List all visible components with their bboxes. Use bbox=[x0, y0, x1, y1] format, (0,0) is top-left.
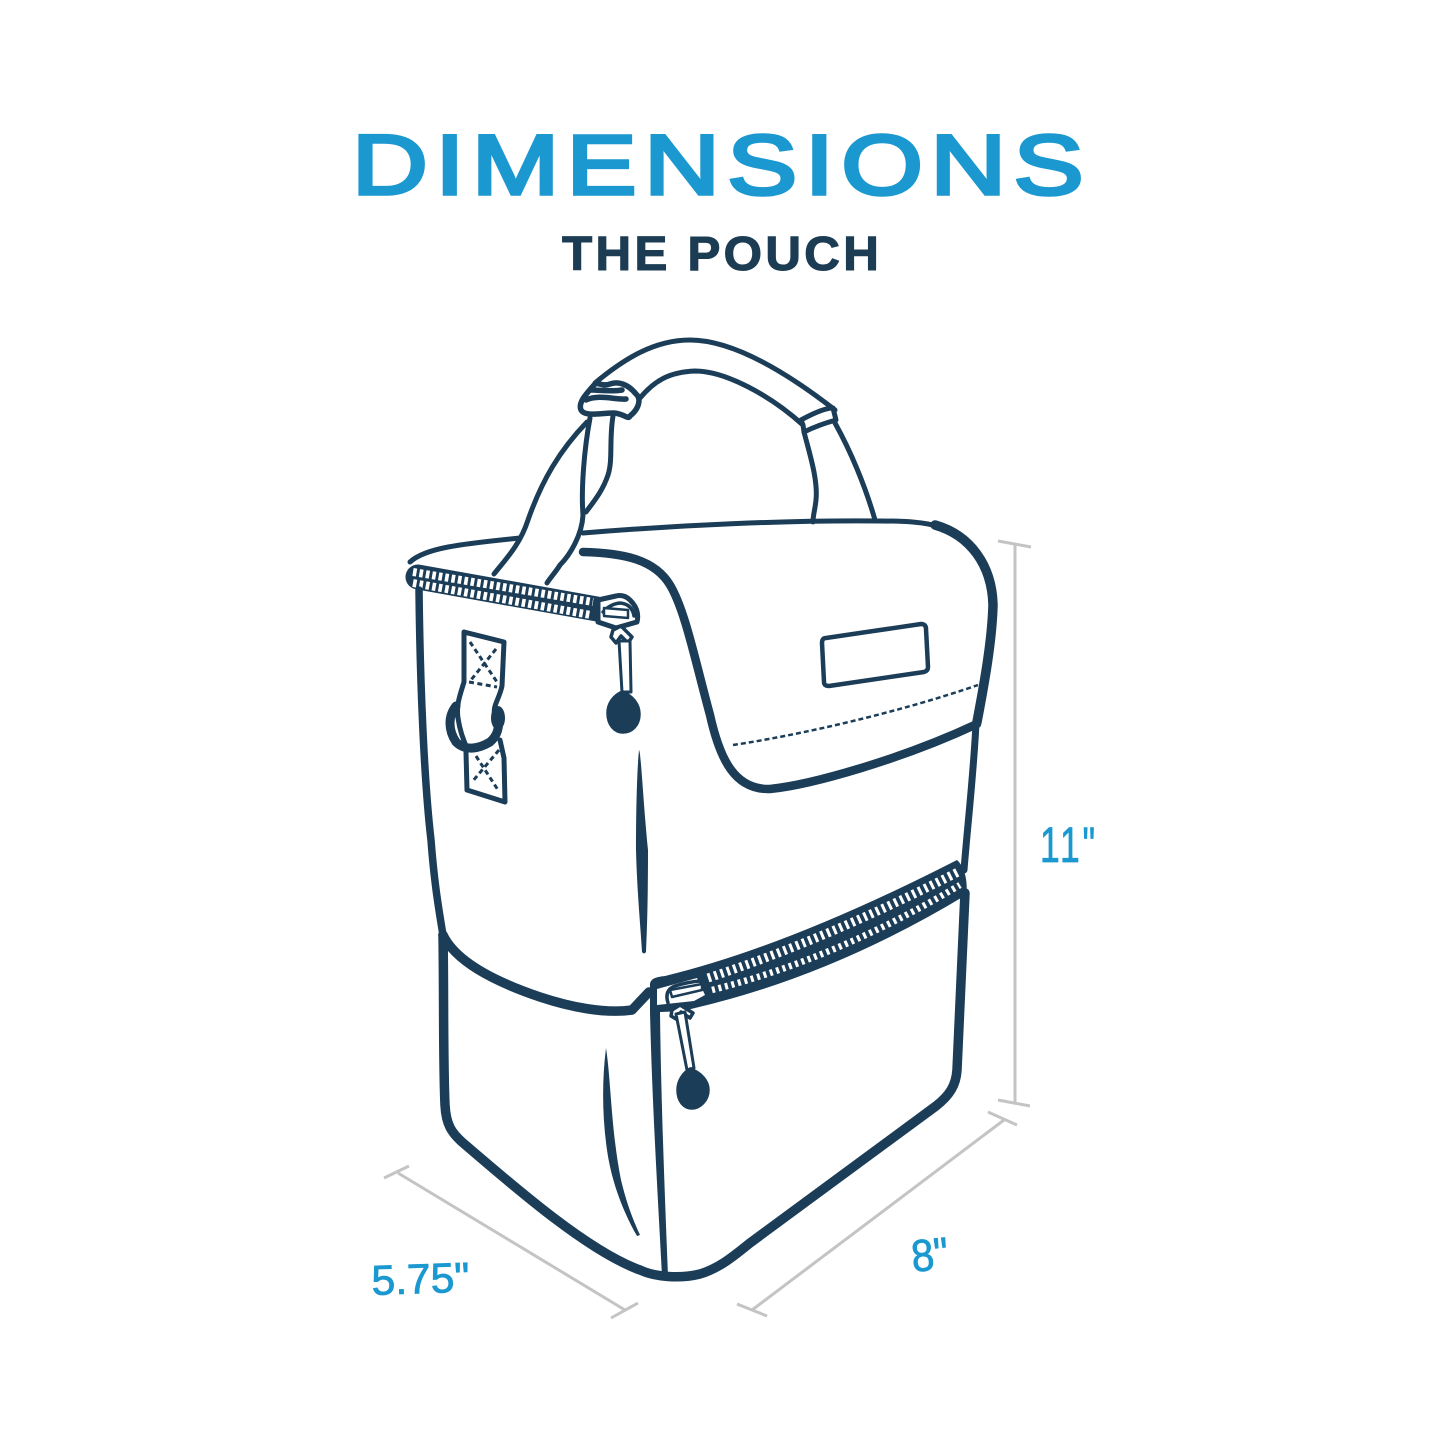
lower zipper pull bbox=[671, 1005, 709, 1109]
top zipper pull bbox=[607, 626, 640, 733]
label: width 5.75 inches: 5.75" bbox=[371, 1254, 470, 1304]
front corner seam, lower bbox=[650, 1012, 668, 1276]
name badge bbox=[822, 624, 928, 686]
dimension line: width bbox=[384, 1166, 638, 1318]
side strap tab bbox=[450, 632, 505, 802]
title: DIMENSIONS bbox=[352, 118, 1091, 212]
dimension line: length bbox=[737, 1112, 1017, 1316]
label: height 11 inches: 11" bbox=[1040, 817, 1098, 873]
middle seam bbox=[443, 935, 649, 1011]
lower zipper bbox=[650, 860, 967, 1012]
body left edge bbox=[419, 590, 443, 935]
handle grip bbox=[595, 340, 836, 432]
bag top rim bbox=[410, 538, 520, 562]
handle right strap bbox=[804, 423, 875, 522]
body lower outline bbox=[443, 893, 965, 1277]
illustration: insulated lunch bag bbox=[410, 340, 993, 1277]
dimension line: height bbox=[998, 541, 1031, 1106]
subtitle: THE POUCH bbox=[562, 228, 882, 281]
label: length 8 inches: 8" bbox=[909, 1227, 951, 1282]
handle left strap bbox=[494, 416, 613, 583]
handle left wrap bbox=[580, 383, 639, 417]
body right edge bbox=[964, 724, 976, 870]
top zipper slider bbox=[598, 596, 638, 628]
top zipper bbox=[413, 572, 597, 615]
flap stitching bbox=[733, 685, 978, 745]
side crease bbox=[603, 1048, 640, 1236]
flap outline bbox=[583, 521, 940, 533]
lower zipper slider bbox=[657, 978, 705, 1005]
front corner seam, upper bbox=[636, 750, 648, 954]
